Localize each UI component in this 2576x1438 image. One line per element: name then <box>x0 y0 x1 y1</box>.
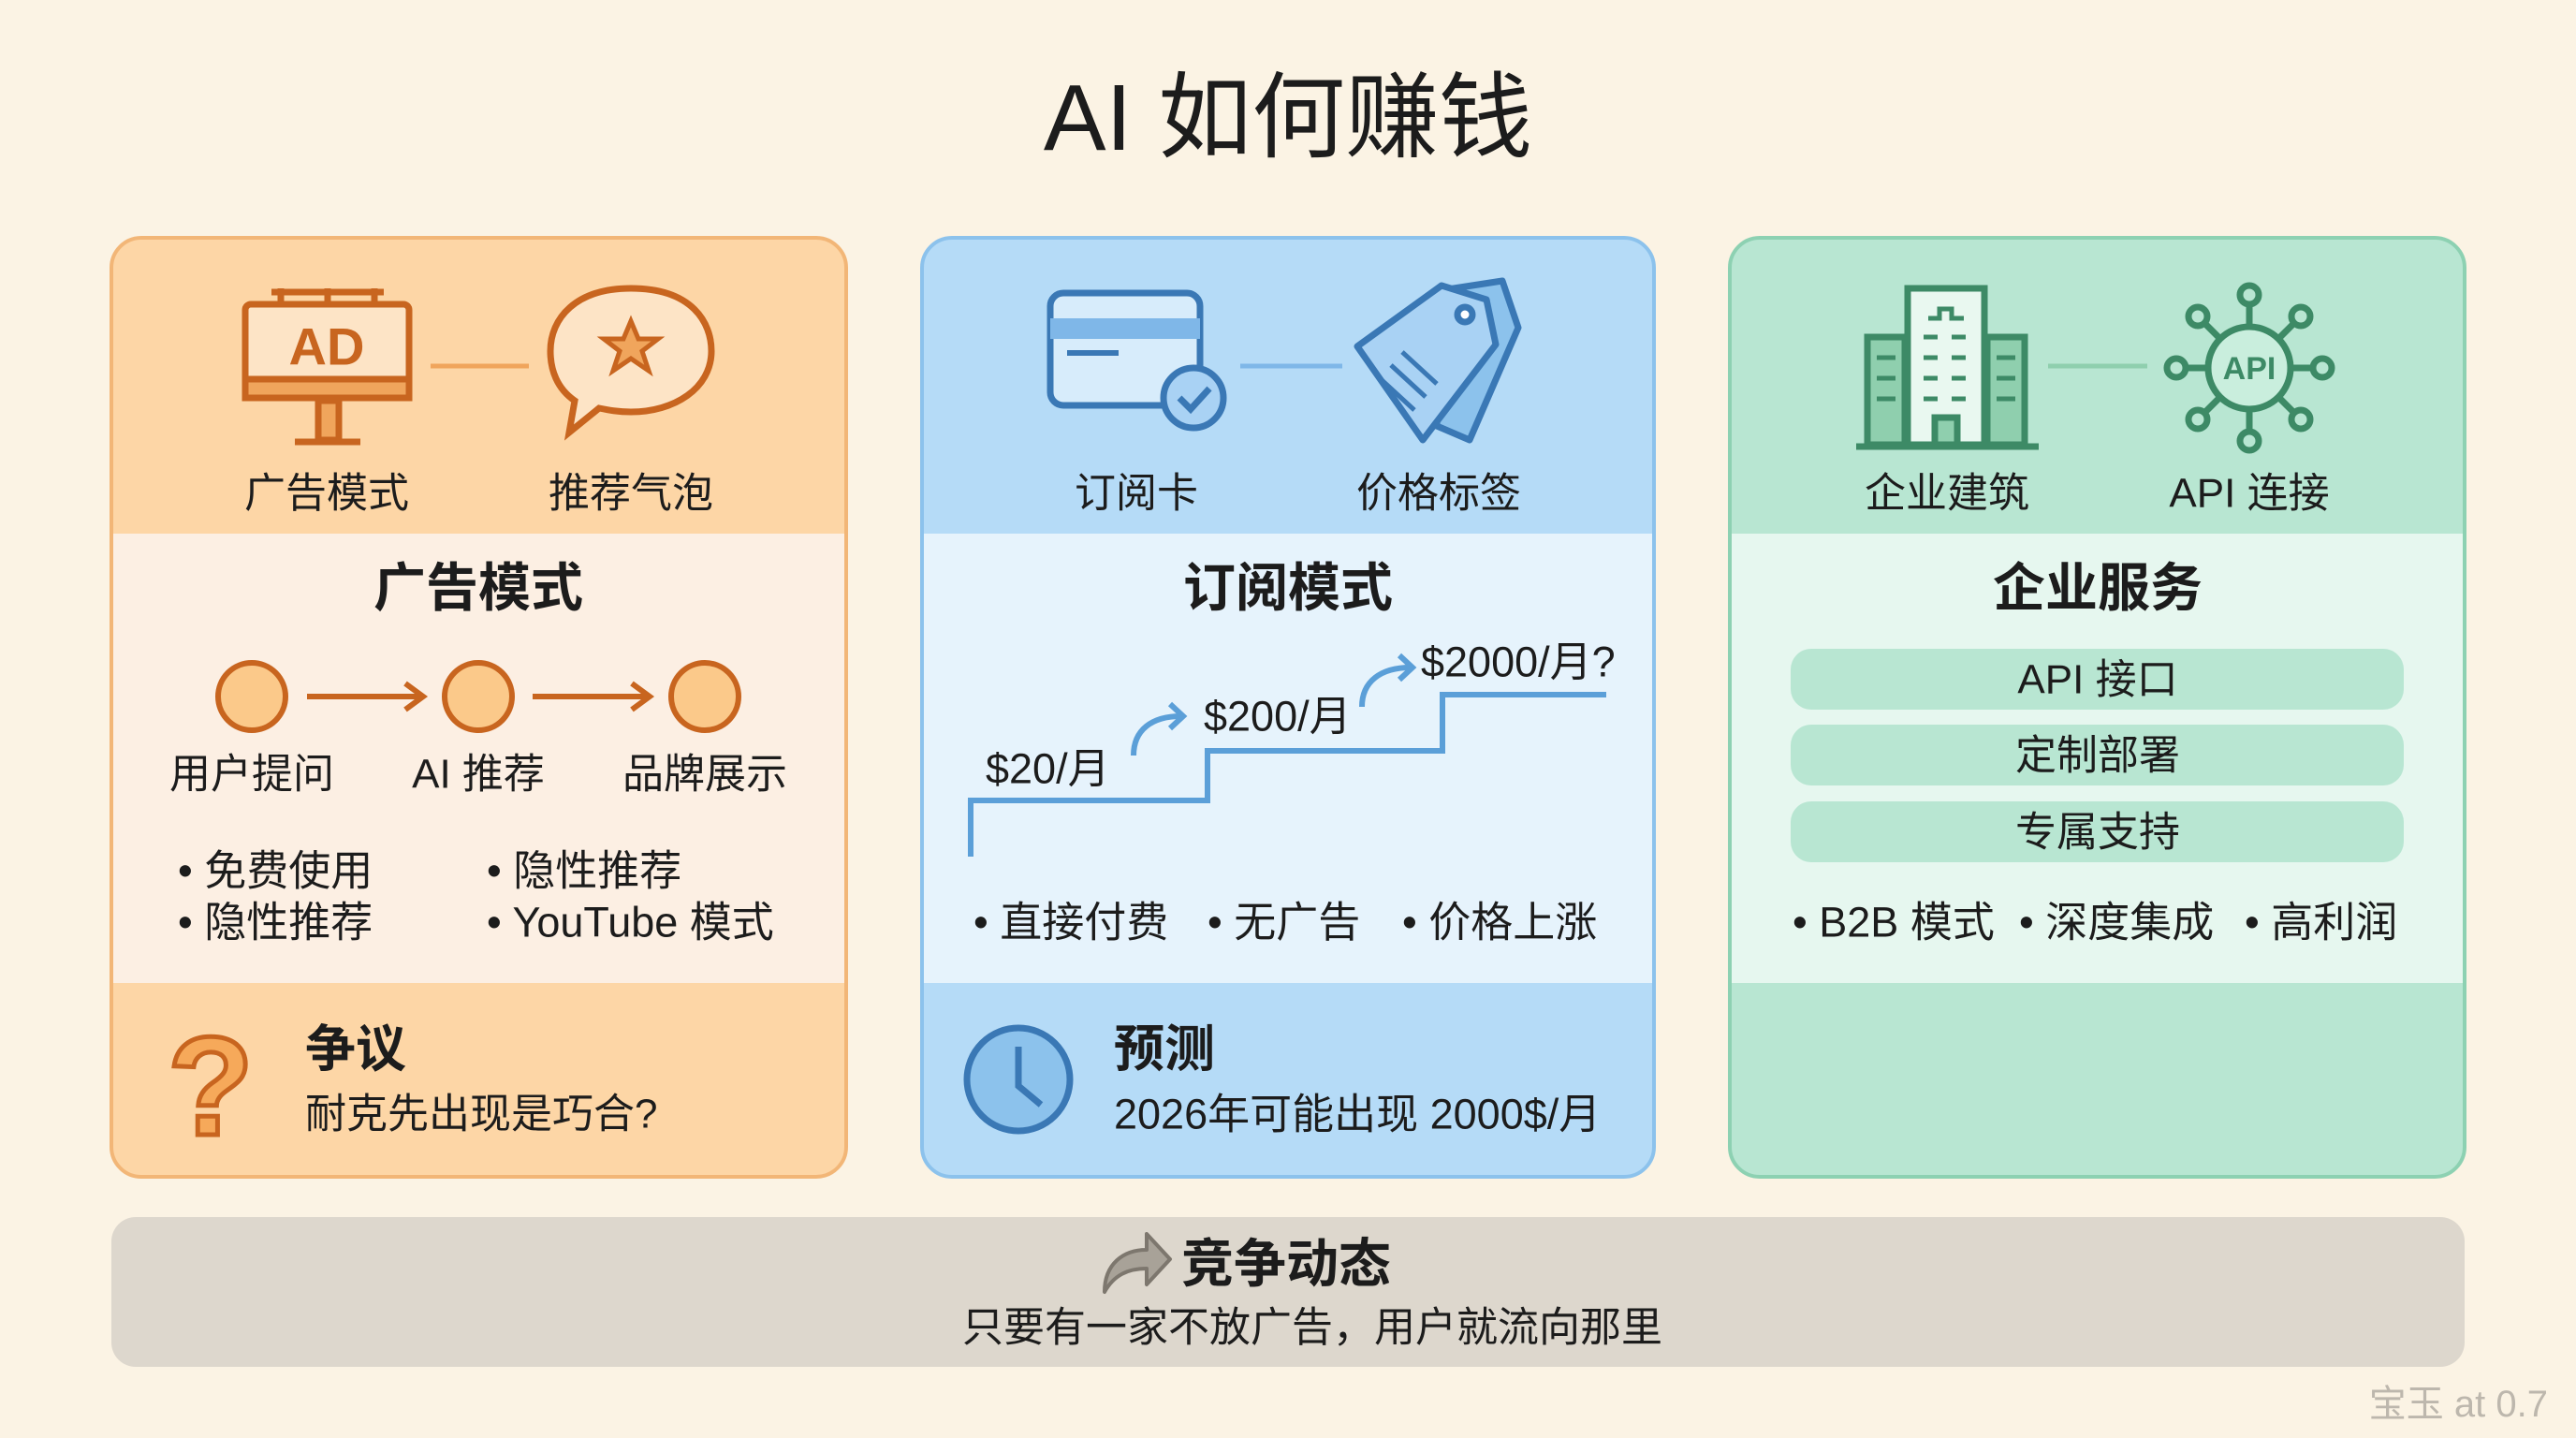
icon: price tag <box>1357 281 1518 440</box>
icon: API hub: API <box>2223 351 2276 387</box>
watermark: 宝玉 at 0.7 <box>2369 1384 2548 1425</box>
panel: subscription: 价格标签 <box>1356 470 1521 517</box>
title: AI 如何赚钱 <box>1044 66 1532 170</box>
icon: billboard <box>245 288 409 442</box>
bullets: • 无广告 <box>1208 899 1360 946</box>
icon labels: 广告模式 <box>244 470 409 517</box>
heading: 广告模式 <box>373 558 583 618</box>
bullets: • YouTube 模式 <box>487 899 774 946</box>
bullets: • 深度集成 <box>2019 899 2214 946</box>
panel: enterprise <box>1730 238 2465 1177</box>
panel: subscription: 2026年可能出现 2000$/月 <box>1114 1090 1601 1138</box>
connector <box>1240 363 1342 369</box>
icon: clock <box>967 1028 1070 1131</box>
empty bottom band <box>1732 983 2463 986</box>
bullets: • B2B 模式 <box>1793 899 1995 946</box>
connector <box>431 363 529 369</box>
service pills: 定制部署 <box>2015 732 2180 779</box>
bullets: • 免费使用 <box>178 846 373 895</box>
bullets <box>1793 899 2397 946</box>
icon labels: 订阅卡 <box>1075 470 1198 517</box>
panel: ad model: 品牌展示 <box>622 751 787 798</box>
service pills: 专属支持 <box>2015 809 2180 856</box>
panel: subscription <box>922 238 1654 1177</box>
step chart <box>971 638 1616 857</box>
panel: ad model <box>111 238 846 1177</box>
connector <box>2048 363 2147 369</box>
heading: 订阅模式 <box>1183 558 1393 618</box>
bullets: • 直接付费 <box>973 899 1168 946</box>
service pills <box>1791 649 2404 862</box>
icon: billboard: AD <box>289 316 364 376</box>
bullets <box>178 846 774 946</box>
bullets: • 高利润 <box>2245 899 2397 946</box>
bullets: • 隐性推荐 <box>487 846 681 895</box>
panel: enterprise: API 连接 <box>2169 470 2330 517</box>
service pills: API 接口 <box>2017 657 2178 702</box>
heading: 企业服务 <box>1993 558 2203 618</box>
panel: competition bar <box>111 1217 2465 1367</box>
step chart: $20/月 <box>986 745 1110 792</box>
flow diagram <box>218 663 739 730</box>
panel: ad model: 用户提问 <box>169 751 334 798</box>
step chart: $200/月 <box>1204 693 1352 740</box>
panel: ad model: AI 推荐 <box>412 751 545 798</box>
panel: ad model: 推荐气泡 <box>549 470 713 517</box>
bullets <box>973 899 1597 946</box>
icon: API hub <box>2167 286 2332 450</box>
icon labels: 企业建筑 <box>1865 470 2029 517</box>
panel: competition bar: 只要有一家不放广告，用户就流向那里 <box>962 1305 1662 1350</box>
controversy text: 争议 <box>305 1021 406 1078</box>
icon: question mark: ? <box>168 1007 254 1165</box>
icon: recommendation bubble <box>550 288 711 433</box>
icon: share arrow <box>1105 1234 1170 1292</box>
bullets: • 价格上涨 <box>1402 899 1597 946</box>
bullets: • 隐性推荐 <box>178 899 373 946</box>
panel: ad model: 耐克先出现是巧合? <box>305 1092 657 1137</box>
icon: card <box>1050 293 1223 428</box>
forecast text: 预测 <box>1114 1021 1215 1078</box>
icon: building <box>1856 288 2039 447</box>
step chart: $2000/月? <box>1421 638 1616 685</box>
panel: competition bar: 竞争动态 <box>1181 1234 1391 1294</box>
